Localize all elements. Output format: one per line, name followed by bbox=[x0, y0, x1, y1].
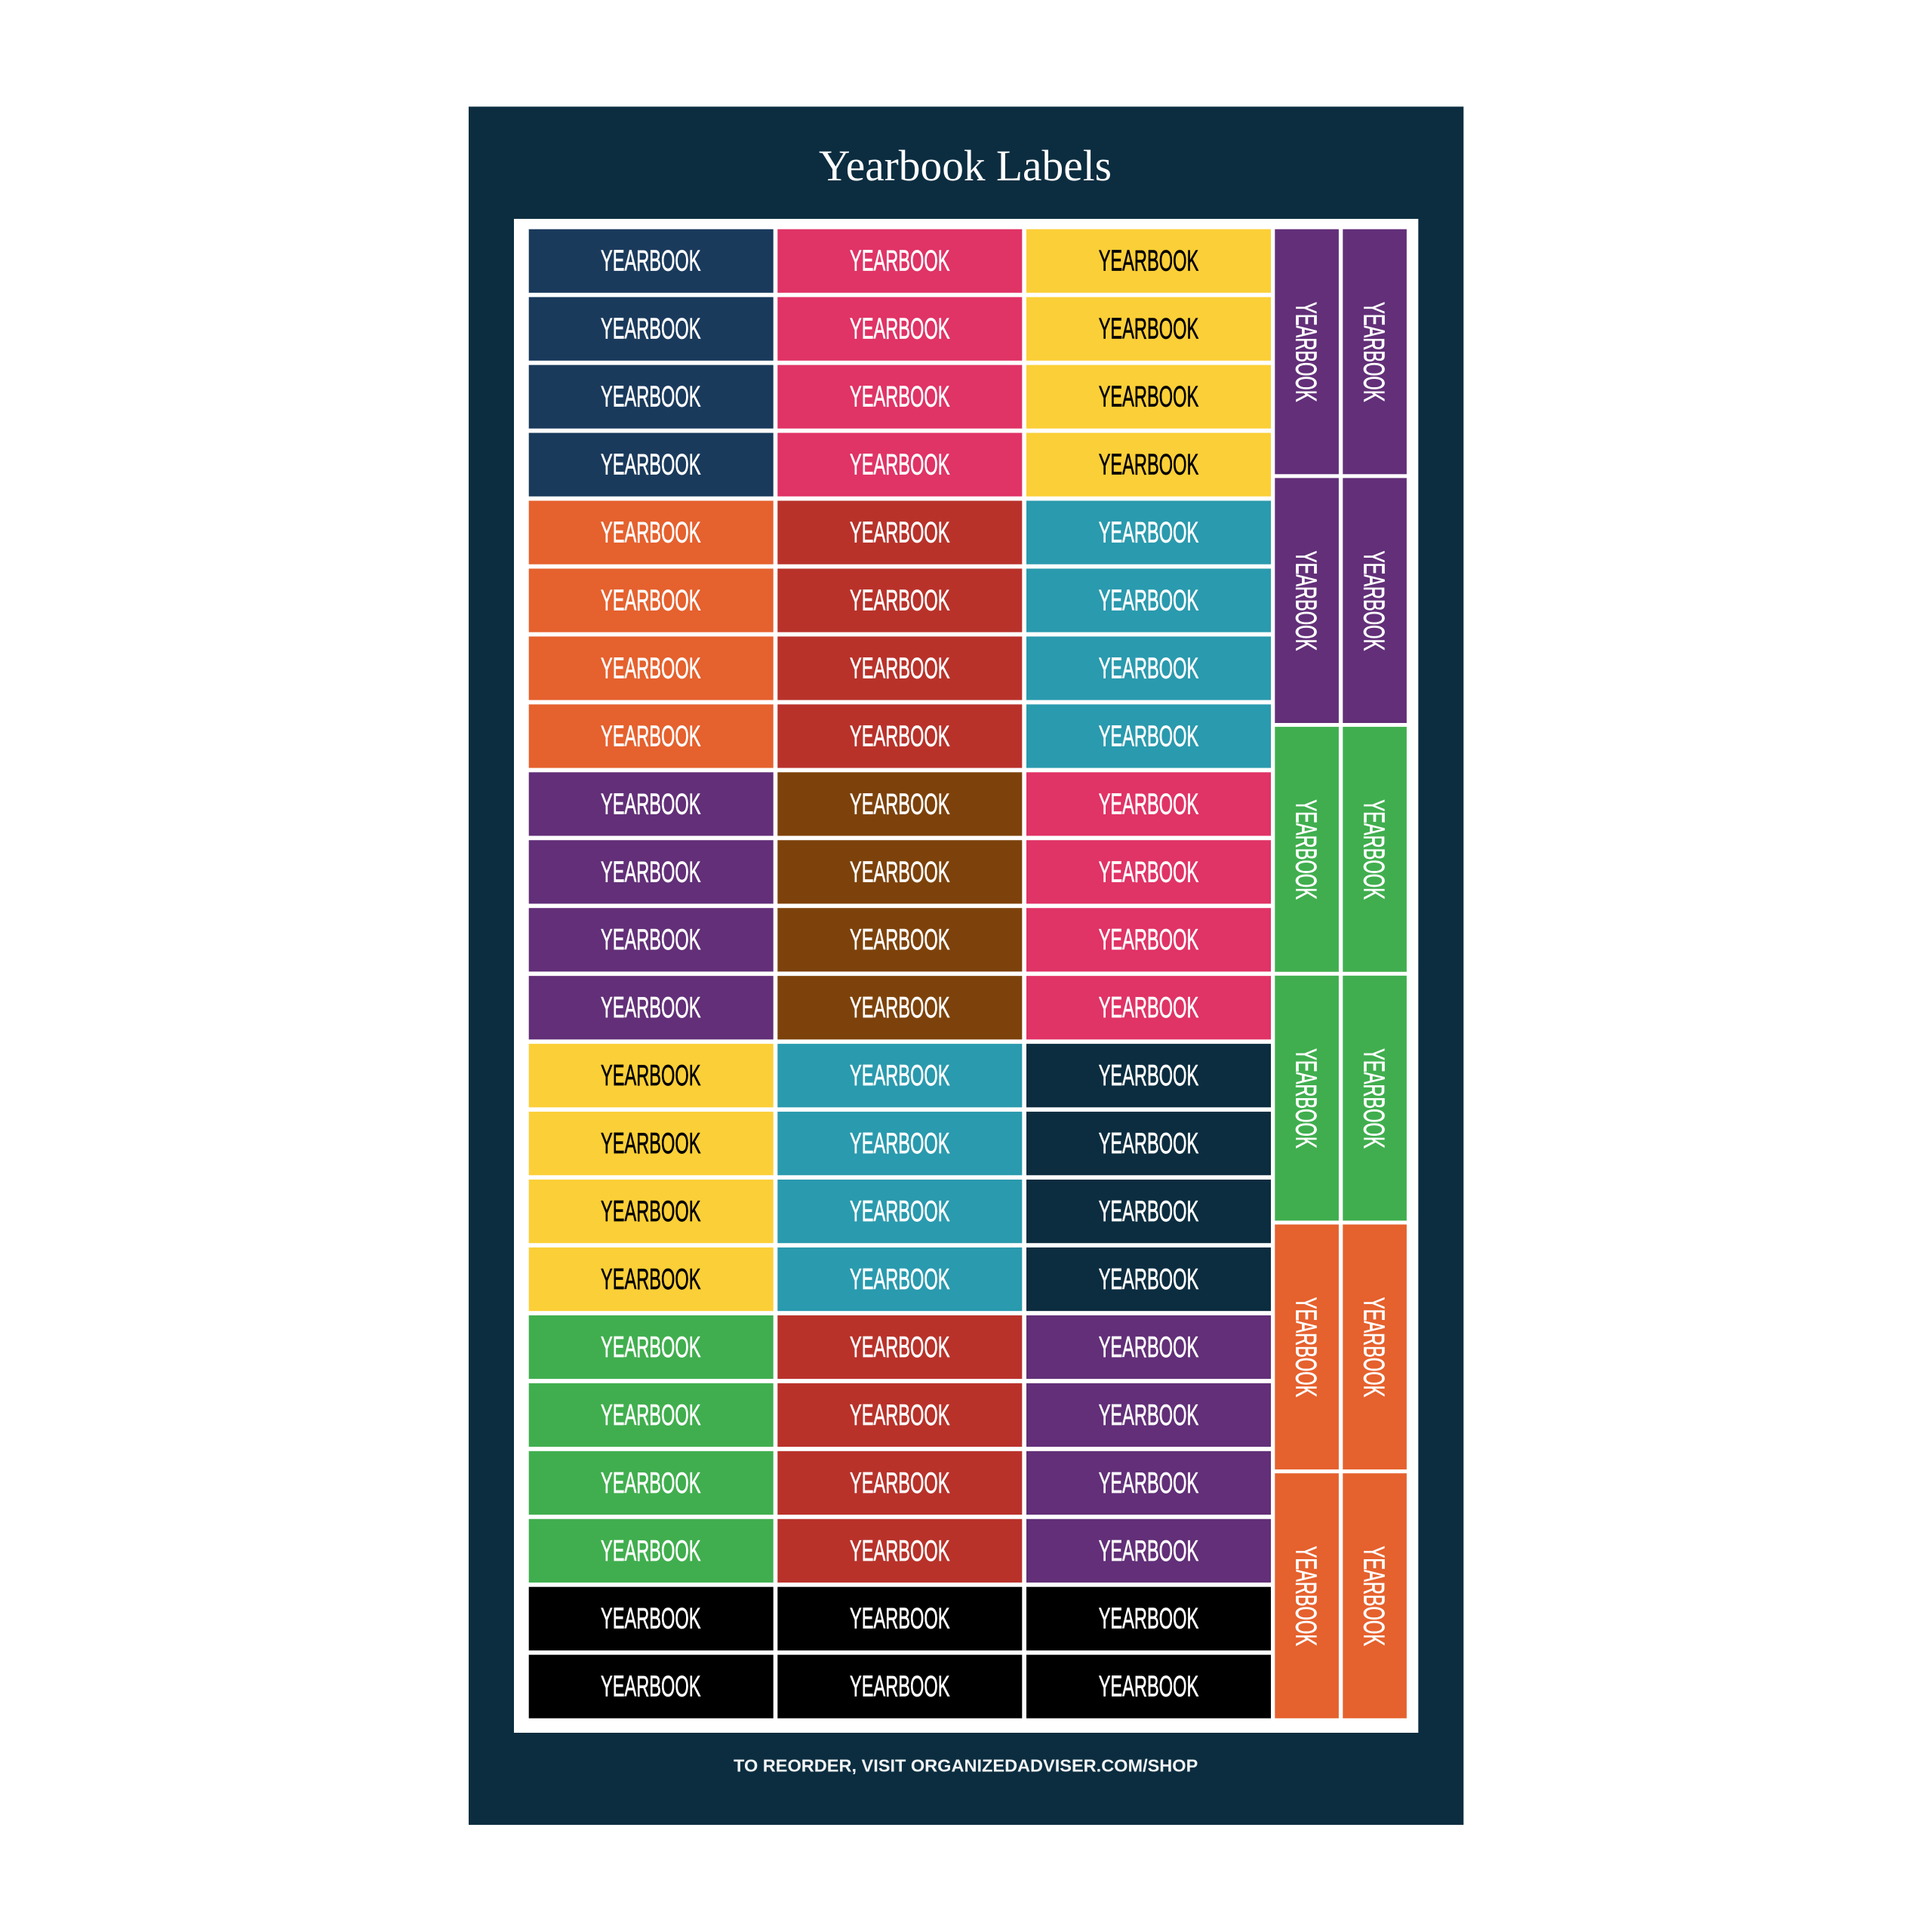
label: teal row 15 bbox=[777, 1180, 1022, 1243]
label: purple row 9: YEARBOOK bbox=[601, 788, 700, 820]
label: yellow row 13: YEARBOOK bbox=[601, 1060, 700, 1092]
label: pink row 4: YEARBOOK bbox=[850, 449, 949, 481]
vertical labels column 1 bbox=[1275, 229, 1339, 1718]
label: teal row 13: YEARBOOK bbox=[850, 1060, 949, 1092]
label: teal row 5 bbox=[1026, 501, 1271, 565]
label: yellow row 15: YEARBOOK bbox=[601, 1195, 700, 1228]
vertical label: green 3: YEARBOOK bbox=[1358, 799, 1390, 900]
vertical label: purple 4: YEARBOOK bbox=[1358, 551, 1390, 651]
label: dark navy row 16 bbox=[1026, 1247, 1271, 1311]
label: purple row 18 bbox=[1026, 1383, 1271, 1447]
label: pink row 9 bbox=[1026, 772, 1271, 836]
label: purple row 18: YEARBOOK bbox=[1099, 1399, 1198, 1432]
label: orange row 6 bbox=[529, 568, 774, 632]
vertical label: purple 3: YEARBOOK bbox=[1358, 302, 1390, 401]
vertical labels column 2 bbox=[1343, 229, 1407, 1718]
vertical label: green 3 bbox=[1343, 727, 1407, 972]
label: purple row 20 bbox=[1026, 1519, 1271, 1583]
label: yellow row 16 bbox=[529, 1247, 774, 1311]
label: orange row 7 bbox=[529, 636, 774, 700]
vertical label: green 2 bbox=[1275, 976, 1339, 1220]
label: yellow row 14: YEARBOOK bbox=[601, 1128, 700, 1160]
title: Yearbook Labels bbox=[819, 141, 1112, 190]
vertical label: orange 1 bbox=[1275, 1224, 1339, 1469]
label: navy row 1 bbox=[529, 229, 774, 293]
label: black row 21: YEARBOOK bbox=[601, 1603, 700, 1635]
label: green row 20: YEARBOOK bbox=[601, 1535, 700, 1567]
label: teal row 16: YEARBOOK bbox=[850, 1263, 949, 1296]
vertical label: green 4 bbox=[1343, 976, 1407, 1220]
label: black row 22: YEARBOOK bbox=[850, 1671, 949, 1703]
label: orange row 5: YEARBOOK bbox=[601, 516, 700, 549]
label: green row 18: YEARBOOK bbox=[601, 1399, 700, 1432]
label: teal row 15: YEARBOOK bbox=[850, 1195, 949, 1228]
label: red row 8: YEARBOOK bbox=[850, 720, 949, 752]
label: yellow row 15 bbox=[529, 1180, 774, 1243]
label: teal row 7: YEARBOOK bbox=[1099, 652, 1198, 685]
label: purple row 11: YEARBOOK bbox=[601, 924, 700, 956]
panel: dark navy sticker sheet backing bbox=[469, 106, 1463, 1825]
label: teal row 8 bbox=[1026, 704, 1271, 768]
label: teal row 16 bbox=[777, 1247, 1022, 1311]
label: pink row 12 bbox=[1026, 976, 1271, 1039]
label: brown row 11: YEARBOOK bbox=[850, 924, 949, 956]
label: black row 21 bbox=[777, 1587, 1022, 1651]
vertical label: orange 4: YEARBOOK bbox=[1358, 1546, 1390, 1646]
label: dark navy row 13: YEARBOOK bbox=[1099, 1060, 1198, 1092]
label: pink row 9: YEARBOOK bbox=[1099, 788, 1198, 820]
label: brown row 11 bbox=[777, 908, 1022, 971]
label: yellow row 2 bbox=[1026, 297, 1271, 361]
label: brown row 9 bbox=[777, 772, 1022, 836]
label: red row 17: YEARBOOK bbox=[850, 1331, 949, 1364]
label: pink row 3 bbox=[777, 365, 1022, 429]
label: brown row 10: YEARBOOK bbox=[850, 856, 949, 888]
vertical label: orange 1: YEARBOOK bbox=[1290, 1297, 1322, 1397]
label: teal row 14 bbox=[777, 1112, 1022, 1175]
label: teal row 7 bbox=[1026, 636, 1271, 700]
vertical label: orange 2 bbox=[1275, 1473, 1339, 1718]
label: teal row 6: YEARBOOK bbox=[1099, 584, 1198, 617]
vertical label: orange 3 bbox=[1343, 1224, 1407, 1469]
label: yellow row 4: YEARBOOK bbox=[1099, 449, 1198, 481]
vertical label: purple 4 bbox=[1343, 478, 1407, 723]
label: red row 7 bbox=[777, 636, 1022, 700]
label: dark navy row 15: YEARBOOK bbox=[1099, 1195, 1198, 1228]
label: red row 20: YEARBOOK bbox=[850, 1535, 949, 1567]
label: brown row 12 bbox=[777, 976, 1022, 1039]
label: yellow row 14 bbox=[529, 1112, 774, 1175]
label: navy row 4: YEARBOOK bbox=[601, 449, 700, 481]
label: purple row 12 bbox=[529, 976, 774, 1039]
label: pink row 10 bbox=[1026, 840, 1271, 903]
label: dark navy row 16: YEARBOOK bbox=[1099, 1263, 1198, 1296]
label: purple row 17: YEARBOOK bbox=[1099, 1331, 1198, 1364]
vertical label: orange 2: YEARBOOK bbox=[1290, 1546, 1322, 1646]
label: teal row 13 bbox=[777, 1044, 1022, 1107]
column 2 labels bbox=[777, 229, 1022, 1718]
label: yellow row 13 bbox=[529, 1044, 774, 1107]
vertical label: purple 3 bbox=[1343, 229, 1407, 474]
label: red row 5 bbox=[777, 501, 1022, 565]
label: yellow row 3 bbox=[1026, 365, 1271, 429]
label: purple row 10: YEARBOOK bbox=[601, 856, 700, 888]
label: yellow row 1 bbox=[1026, 229, 1271, 293]
label: green row 19: YEARBOOK bbox=[601, 1467, 700, 1500]
vertical label: green 2: YEARBOOK bbox=[1290, 1048, 1322, 1149]
vertical label: purple 1 bbox=[1275, 229, 1339, 474]
label: black row 21: YEARBOOK bbox=[1099, 1603, 1198, 1635]
label: black row 21 bbox=[529, 1587, 774, 1651]
label: pink row 3: YEARBOOK bbox=[850, 381, 949, 414]
label: pink row 12: YEARBOOK bbox=[1099, 992, 1198, 1024]
label: pink row 4 bbox=[777, 433, 1022, 497]
label: yellow row 16: YEARBOOK bbox=[601, 1263, 700, 1296]
label: black row 22 bbox=[777, 1655, 1022, 1718]
label: brown row 12: YEARBOOK bbox=[850, 992, 949, 1024]
label: pink row 1 bbox=[777, 229, 1022, 293]
label: orange row 8 bbox=[529, 704, 774, 768]
label: brown row 9: YEARBOOK bbox=[850, 788, 949, 820]
label: teal row 8: YEARBOOK bbox=[1099, 720, 1198, 752]
label: red row 20 bbox=[777, 1519, 1022, 1583]
label: purple row 20: YEARBOOK bbox=[1099, 1535, 1198, 1567]
label: pink row 1: YEARBOOK bbox=[850, 245, 949, 278]
vertical label: green 1: YEARBOOK bbox=[1290, 799, 1322, 900]
vertical label: green 4: YEARBOOK bbox=[1358, 1048, 1390, 1149]
label: red row 7: YEARBOOK bbox=[850, 652, 949, 685]
label: dark navy row 14: YEARBOOK bbox=[1099, 1128, 1198, 1160]
label: black row 22: YEARBOOK bbox=[1099, 1671, 1198, 1703]
label: purple row 10 bbox=[529, 840, 774, 903]
label: red row 17 bbox=[777, 1315, 1022, 1379]
label: teal row 14: YEARBOOK bbox=[850, 1128, 949, 1160]
label: purple row 12: YEARBOOK bbox=[601, 992, 700, 1024]
label: navy row 2: YEARBOOK bbox=[601, 313, 700, 346]
label: purple row 9 bbox=[529, 772, 774, 836]
label: black row 22 bbox=[529, 1655, 774, 1718]
label: dark navy row 15 bbox=[1026, 1180, 1271, 1243]
vertical label: orange 3: YEARBOOK bbox=[1358, 1297, 1390, 1397]
label: navy row 2 bbox=[529, 297, 774, 361]
label: dark navy row 14 bbox=[1026, 1112, 1271, 1175]
label: yellow row 4 bbox=[1026, 433, 1271, 497]
label: teal row 6 bbox=[1026, 568, 1271, 632]
label: red row 6: YEARBOOK bbox=[850, 584, 949, 617]
label: navy row 3: YEARBOOK bbox=[601, 381, 700, 414]
label: green row 18 bbox=[529, 1383, 774, 1447]
label: purple row 19: YEARBOOK bbox=[1099, 1467, 1198, 1500]
label: pink row 2: YEARBOOK bbox=[850, 313, 949, 346]
label: pink row 10: YEARBOOK bbox=[1099, 856, 1198, 888]
vertical label: green 1 bbox=[1275, 727, 1339, 972]
label: pink row 11 bbox=[1026, 908, 1271, 971]
label: red row 18: YEARBOOK bbox=[850, 1399, 949, 1432]
label: green row 19 bbox=[529, 1451, 774, 1515]
label: black row 21 bbox=[1026, 1587, 1271, 1651]
label: orange row 7: YEARBOOK bbox=[601, 652, 700, 685]
vertical label: orange 4 bbox=[1343, 1473, 1407, 1718]
label: purple row 17 bbox=[1026, 1315, 1271, 1379]
label: navy row 1: YEARBOOK bbox=[601, 245, 700, 278]
label: green row 17 bbox=[529, 1315, 774, 1379]
label: yellow row 2: YEARBOOK bbox=[1099, 313, 1198, 346]
column 3 labels bbox=[1026, 229, 1271, 1718]
label: green row 20 bbox=[529, 1519, 774, 1583]
footer reorder note: TO REORDER, VISIT ORGANIZEDADVISER.COM/SHOP bbox=[734, 1755, 1198, 1775]
label: red row 8 bbox=[777, 704, 1022, 768]
label: pink row 11: YEARBOOK bbox=[1099, 924, 1198, 956]
label: yellow row 1: YEARBOOK bbox=[1099, 245, 1198, 278]
label: red row 18 bbox=[777, 1383, 1022, 1447]
panel: label grid bbox=[529, 229, 1407, 1718]
label: red row 19: YEARBOOK bbox=[850, 1467, 949, 1500]
label: navy row 4 bbox=[529, 433, 774, 497]
label: dark navy row 13 bbox=[1026, 1044, 1271, 1107]
label: orange row 8: YEARBOOK bbox=[601, 720, 700, 752]
label: black row 22: YEARBOOK bbox=[601, 1671, 700, 1703]
label: black row 21: YEARBOOK bbox=[850, 1603, 949, 1635]
vertical label: purple 2: YEARBOOK bbox=[1290, 551, 1322, 651]
vertical label: purple 1: YEARBOOK bbox=[1290, 302, 1322, 401]
label: teal row 5: YEARBOOK bbox=[1099, 516, 1198, 549]
panel: white label area bbox=[514, 219, 1418, 1733]
vertical label: purple 2 bbox=[1275, 478, 1339, 723]
label: yellow row 3: YEARBOOK bbox=[1099, 381, 1198, 414]
label: purple row 19 bbox=[1026, 1451, 1271, 1515]
column 1 labels bbox=[529, 229, 774, 1718]
label: red row 5: YEARBOOK bbox=[850, 516, 949, 549]
label: red row 19 bbox=[777, 1451, 1022, 1515]
label: green row 17: YEARBOOK bbox=[601, 1331, 700, 1364]
label: red row 6 bbox=[777, 568, 1022, 632]
label: brown row 10 bbox=[777, 840, 1022, 903]
label: orange row 6: YEARBOOK bbox=[601, 584, 700, 617]
label: purple row 11 bbox=[529, 908, 774, 971]
label: pink row 2 bbox=[777, 297, 1022, 361]
label: orange row 5 bbox=[529, 501, 774, 565]
label: black row 22 bbox=[1026, 1655, 1271, 1718]
label: navy row 3 bbox=[529, 365, 774, 429]
